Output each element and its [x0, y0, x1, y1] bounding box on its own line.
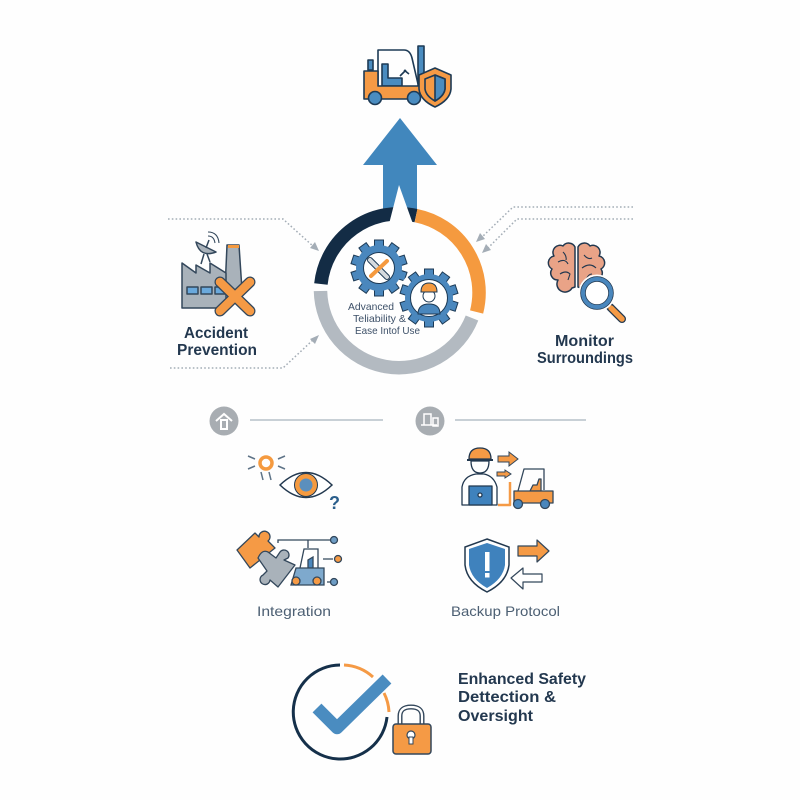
- icon: orange forklift: [498, 469, 553, 508]
- heading: Monitor Surroundings: Monitor: [555, 333, 614, 350]
- icon: check circle: [293, 665, 389, 759]
- text: central label: [348, 301, 420, 337]
- icon: sun: [248, 456, 285, 480]
- arrow: dotted connector top left: [168, 219, 319, 251]
- arrow: dotted connector top right 2: [482, 219, 633, 253]
- icon: connected forklift: [278, 536, 342, 586]
- heading: Enhanced Safety Detection and Oversight: [458, 671, 586, 725]
- chart: central progress ring: [320, 185, 479, 368]
- heading: Accident Prevention: Accident: [184, 325, 248, 342]
- heading: Enhanced Safety Detection and Oversight: Enhanced Safety: [458, 671, 586, 688]
- icon: gear with worker: [398, 267, 460, 329]
- text: Backup Protocol: Backup Protocol: [451, 603, 560, 619]
- icon: worker with tablet: [462, 448, 497, 505]
- heading: Monitor Surroundings: [537, 333, 633, 367]
- heading: Enhanced Safety Detection and Oversight: Dettection &: [458, 689, 556, 706]
- heading: Enhanced Safety Detection and Oversight: Oversight: [458, 708, 534, 725]
- heading: Accident Prevention: [177, 325, 257, 359]
- heading: Accident Prevention: Prevention: [177, 342, 257, 359]
- icon: puzzle pieces: [237, 531, 295, 587]
- arrow: upward blue arrow: [363, 118, 437, 212]
- arrow: dotted connector bottom left: [170, 335, 319, 368]
- icon: padlock: [393, 707, 431, 754]
- icon: brain with magnifier: [548, 243, 622, 319]
- icon: badge forklift: [416, 406, 444, 436]
- text: central label: Ease Intof Use: [355, 325, 420, 337]
- icon: orange arrows to forklift: [497, 452, 518, 478]
- icon: factory with cross: [182, 232, 250, 311]
- text: Integration: Integration: [257, 603, 331, 619]
- arrow: dotted connector top right 1: [476, 207, 633, 242]
- icon: shield with exclamation: [465, 539, 509, 592]
- icon: exchange arrows: [511, 540, 549, 589]
- icon: eye with question mark: ?: [329, 493, 340, 513]
- heading: Monitor Surroundings: Surroundings: [537, 350, 633, 367]
- text: central label: Advanced: [348, 301, 394, 313]
- icon: forklift with shield: [364, 46, 451, 107]
- icon: eye with question mark: [280, 472, 340, 513]
- text: central label: Teliability &: [353, 313, 406, 325]
- icon: badge home: [210, 406, 238, 436]
- icon: gear with tools: [351, 240, 407, 296]
